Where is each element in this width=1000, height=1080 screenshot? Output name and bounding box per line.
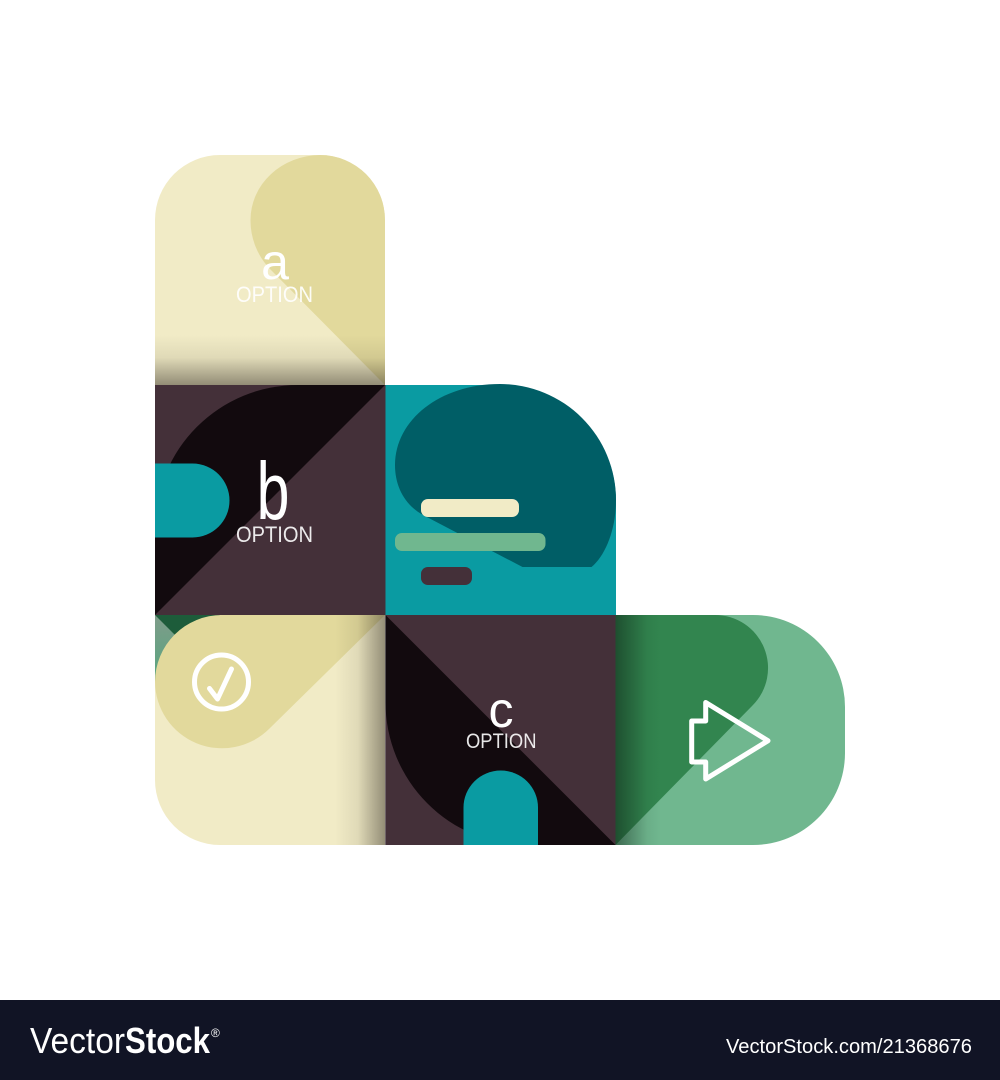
option a label: [236, 234, 313, 307]
icon: check mark in circle: [194, 655, 248, 709]
panel: option b: [155, 385, 386, 615]
option c label: c: [488, 682, 514, 738]
panel: option a: [155, 155, 385, 385]
option a label: OPTION: [236, 282, 313, 307]
option c label: [466, 682, 536, 753]
panel: check card: [155, 615, 386, 845]
footer logo: [30, 1020, 220, 1061]
panel: arrow card: [616, 615, 845, 845]
footer logo: Stock: [125, 1020, 211, 1061]
footer image id: VectorStock.com/21368676: [726, 1036, 972, 1058]
footer logo: ®: [211, 1026, 220, 1040]
footer logo: Vector: [30, 1020, 125, 1061]
icon: outlined arrow: [692, 702, 768, 779]
option a label: a: [261, 234, 289, 290]
footer bar: [0, 1000, 1000, 1080]
option b label: b: [257, 446, 289, 537]
text bar: cream: [421, 499, 519, 517]
option b label: [236, 446, 313, 547]
panel: option c: [385, 615, 616, 845]
option c label: OPTION: [466, 730, 536, 753]
text bar: green: [395, 533, 546, 551]
panel: teal text card: [386, 384, 616, 615]
text bar: plum: [421, 567, 472, 585]
option b label: OPTION: [236, 522, 313, 547]
